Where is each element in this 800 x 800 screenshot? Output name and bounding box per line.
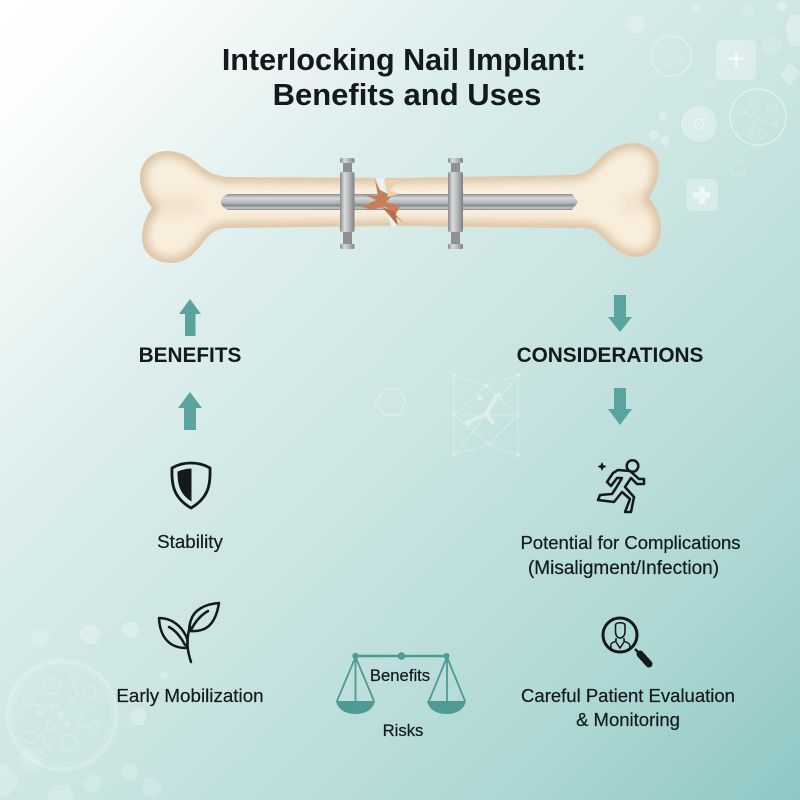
icon: magnifier with patient — [603, 618, 649, 664]
label: early mobilization: Early Mobilization — [116, 685, 264, 706]
femur bone — [140, 143, 661, 263]
label: careful patient evaluation — [521, 685, 735, 730]
heading: benefits: BENEFITS — [139, 344, 242, 367]
label: potential for complications: Potential for Complications — [520, 532, 741, 553]
icon: balance scale — [336, 652, 466, 714]
arrow: benefits lower — [178, 392, 202, 430]
title: Interlocking Nail Implant: — [222, 43, 586, 77]
icon: leaf sprout — [159, 603, 219, 662]
nail — [221, 194, 578, 210]
title: Benefits and Uses — [273, 77, 541, 112]
decorative medical motifs: center — [375, 373, 520, 457]
decorative medical motifs: top right — [627, 1, 800, 211]
label: potential for complications — [520, 532, 741, 579]
bone illustration with interlocking nail — [140, 143, 661, 263]
heading: considerations: CONSIDERATIONS — [517, 344, 704, 367]
arrow: considerations upper — [608, 295, 632, 332]
label: benefits on scale: Benefits — [370, 666, 430, 685]
decorative medical motifs: bottom left — [0, 622, 168, 800]
locking screw left — [340, 158, 354, 249]
title — [222, 43, 586, 112]
icon: running person — [598, 460, 644, 512]
arrow: benefits upper — [179, 299, 201, 336]
label: potential for complications: (Misaligment/Infection) — [528, 558, 719, 579]
label: stability: Stability — [157, 531, 223, 552]
arrow: considerations lower — [608, 388, 632, 425]
label: careful patient evaluation: Careful Patient Evaluation — [521, 685, 735, 706]
locking screw right — [448, 158, 463, 249]
fracture shards — [362, 180, 405, 226]
label: risks on scale: Risks — [383, 721, 423, 740]
icon: shield — [172, 463, 210, 508]
label: careful patient evaluation: & Monitoring — [576, 709, 680, 730]
